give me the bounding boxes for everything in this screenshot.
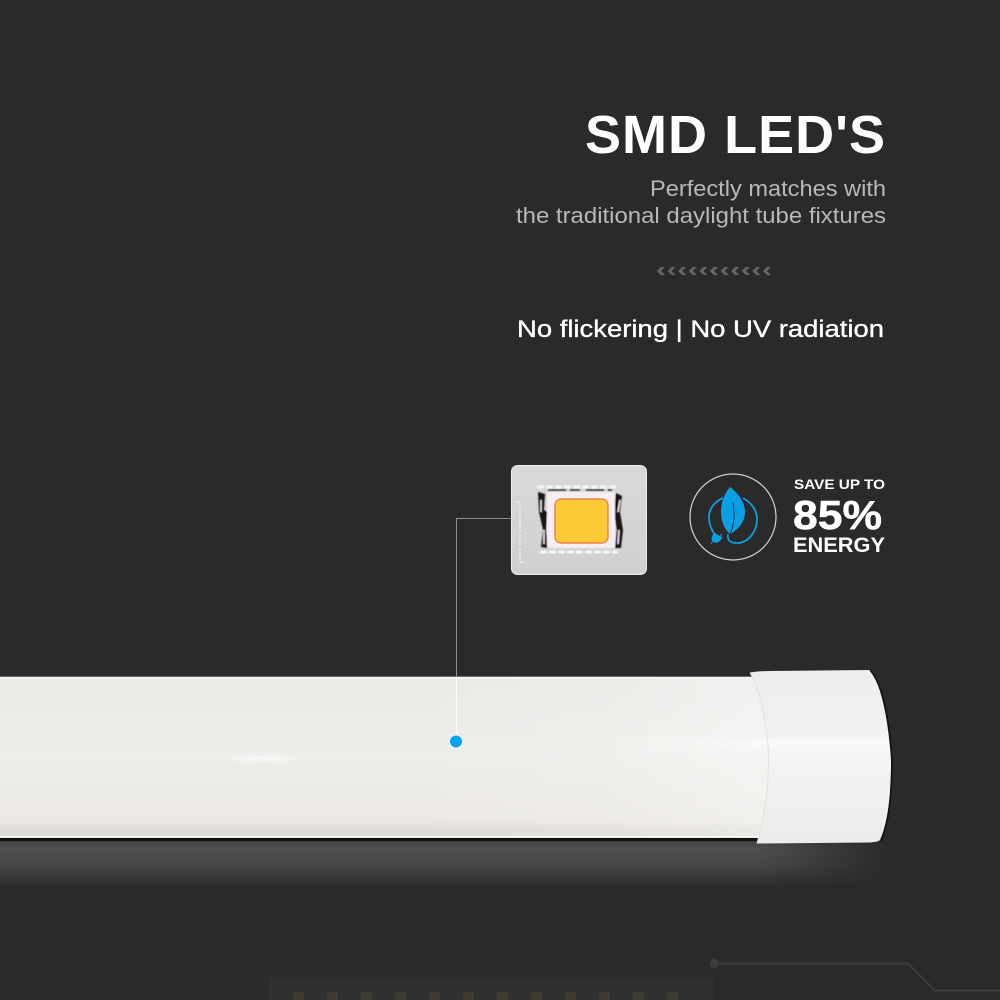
description text [516, 176, 886, 228]
title: SMD LED'S [585, 105, 885, 165]
callout line [456, 518, 512, 741]
chip housing [547, 492, 615, 548]
outer speckle [537, 487, 618, 552]
tube body [0, 677, 775, 838]
dark side contacts [538, 492, 548, 548]
faint LED strip [269, 977, 713, 1000]
LED tube [0, 670, 892, 844]
reflection under tube [0, 841, 859, 882]
board markings [516, 502, 524, 562]
badge ring [690, 474, 776, 560]
chip board [512, 466, 646, 574]
top contact [548, 489, 612, 491]
icon: leaf and plug [709, 487, 757, 544]
callout dot [450, 735, 462, 748]
white side gaps [541, 500, 620, 544]
energy label: ENERGY [793, 533, 885, 557]
yellow emitter [555, 499, 608, 543]
end cap [750, 670, 892, 844]
LED chip close-up [512, 466, 646, 574]
description text: Perfectly matches with [650, 176, 886, 201]
light glint [212, 752, 312, 764]
chip detail [537, 487, 623, 552]
highlight band [600, 738, 770, 750]
description text: the traditional daylight tube fixtures [516, 203, 886, 228]
chevron divider [657, 267, 771, 275]
feature line: No flickering | No UV radiation [517, 316, 884, 343]
save label: SAVE UP TO [794, 476, 885, 492]
energy saving badge [690, 474, 885, 560]
percentage: 85% [793, 492, 882, 538]
faint circuit line [710, 958, 1000, 990]
